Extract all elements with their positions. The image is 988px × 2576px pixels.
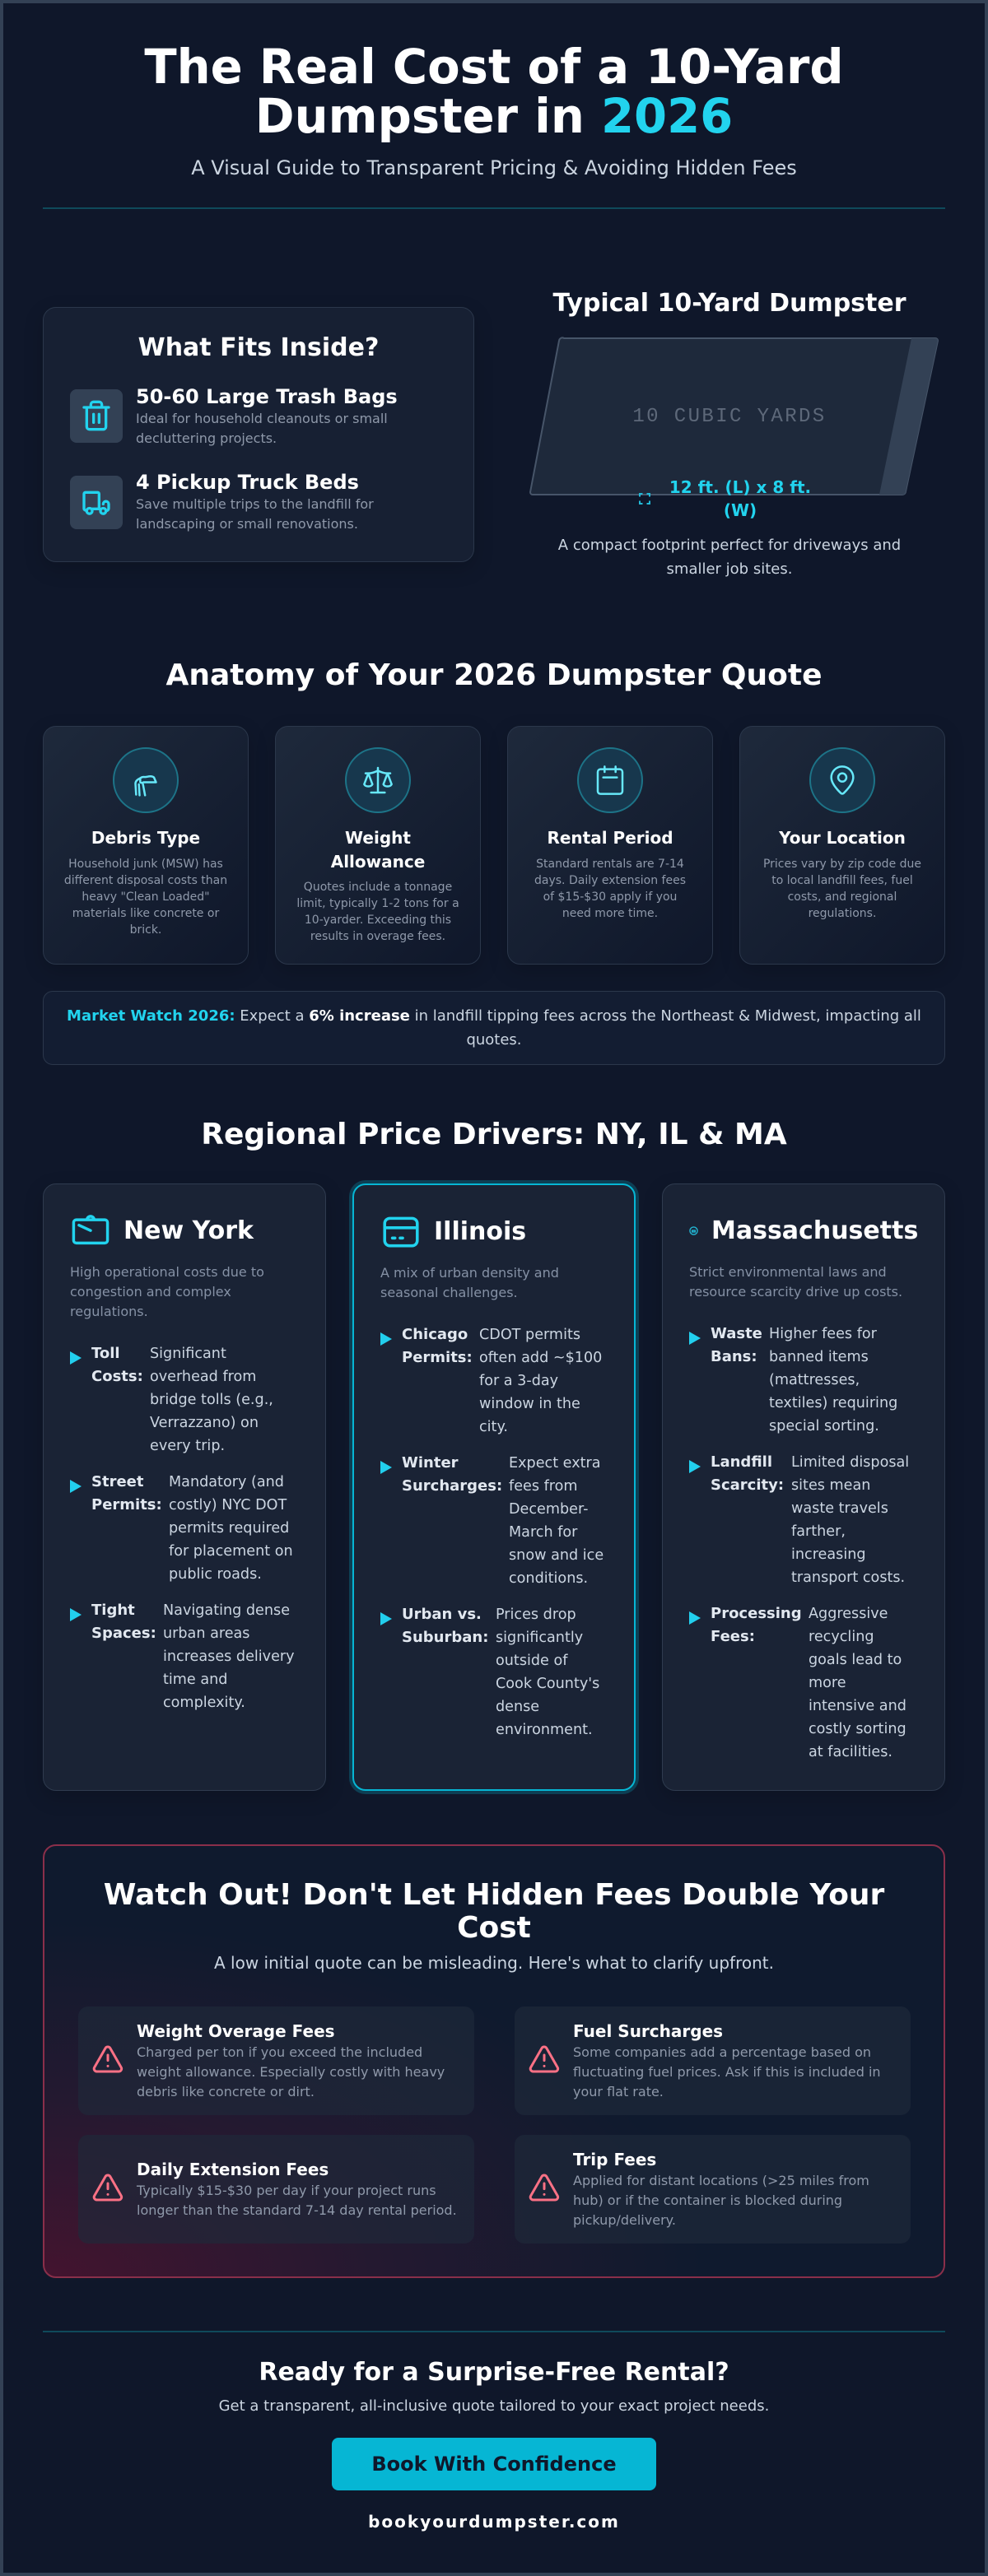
item description: truck beds: landscaping or small renovations.: [136, 516, 358, 532]
bullet: tight spaces: Spaces:: [91, 1625, 156, 1642]
state summary: new york: congestion and complex: [70, 1284, 231, 1300]
card: your location: [739, 726, 945, 965]
state summary: new york: [70, 1264, 264, 1319]
bullet: processing fees: goals lead to: [809, 1652, 902, 1668]
bullet: waste bans: (mattresses,: [769, 1372, 860, 1388]
text: debris type: heavy "Clean Loaded": [82, 890, 210, 904]
text: your location: Prices vary by zip code due: [763, 858, 921, 871]
state summary: illinois: A mix of urban density and: [380, 1265, 559, 1281]
website url: bookyourdumpster.com: [368, 2512, 620, 2532]
bullet: landfill scarcity: waste travels: [791, 1500, 888, 1517]
bullet: urban vs suburban: Prices drop: [496, 1607, 576, 1623]
bullet: street permits: Street: [91, 1473, 143, 1490]
bullet: street permits: for placement on: [169, 1543, 293, 1560]
bullet: tight spaces: time and: [163, 1672, 227, 1688]
icon: truck: [70, 476, 123, 529]
text: your location: costs, and regional: [788, 890, 897, 904]
bullet: waste bans: Bans:: [711, 1348, 757, 1365]
icon: calendar: [577, 747, 643, 813]
panel: massachusetts: [662, 1183, 945, 1791]
dimensions label: [669, 477, 811, 520]
bullet: processing fees: recycling: [809, 1629, 874, 1645]
bullet: chicago permits: Chicago: [402, 1326, 468, 1343]
fee text: fluctuating fuel prices. Ask if this is included in: [573, 2064, 881, 2080]
dimensions label: 12 ft. (L) x 8 ft.: [669, 477, 811, 497]
bullet: landfill scarcity: increasing: [791, 1546, 866, 1563]
heading: typical dumpster: Typical 10-Yard Dumpster: [552, 289, 906, 318]
bullet: winter surcharges: Surcharges:: [402, 1477, 502, 1495]
fee title: Daily Extension Fees: [137, 2160, 329, 2179]
bullet: landfill scarcity: Scarcity:: [711, 1476, 784, 1494]
state summary: illinois: [380, 1265, 559, 1300]
heading: regional: Regional Price Drivers: NY, IL & MA: [201, 1118, 787, 1151]
fee: trip fees: [515, 2135, 911, 2244]
bullet: urban vs suburban: [380, 1606, 599, 1738]
fee title: Trip Fees: [573, 2150, 656, 2169]
icon: debris: [113, 747, 179, 813]
heading: call to action: Ready for a Surprise-Free Rental?: [259, 2358, 729, 2387]
fee text: pickup/delivery.: [573, 2212, 676, 2228]
panel: illinois: [352, 1183, 636, 1791]
heading: watch out: Cost: [457, 1911, 531, 1945]
heading: watch out: Watch Out! Don't Let Hidden Fees Double Your: [104, 1878, 884, 1912]
card: debris type: [43, 726, 249, 965]
item description: trash bags: Ideal for household cleanouts or small: [136, 411, 388, 426]
button: book with confidence: Book With Confidence: [371, 2453, 617, 2476]
item description: trash bags: decluttering projects.: [136, 430, 277, 446]
bullet: toll costs: overhead from: [150, 1369, 256, 1385]
bullet: toll costs: Costs:: [91, 1368, 143, 1385]
bullet: chicago permits: often add ~$100: [479, 1350, 602, 1366]
bullet: toll costs: bridge tolls (e.g.,: [150, 1392, 273, 1408]
title: Dumpster in 2026: [255, 89, 733, 144]
title: weight allowance: Weight: [345, 828, 411, 848]
text: weight allowance: [296, 881, 459, 943]
callout text: Market Watch 2026: Expect a 6% increase in landfill tipping fees across the Northeast & Midwest, impacting all: [67, 1007, 921, 1025]
bullet: tight spaces: Navigating dense: [163, 1602, 290, 1619]
dimensions label: (W): [724, 500, 757, 520]
bullet: processing fees: at facilities.: [809, 1744, 892, 1760]
bullet: street permits: Permits:: [91, 1496, 162, 1514]
fee text: your flat rate.: [573, 2084, 664, 2099]
fee text: longer than the standard 7-14 day rental period.: [137, 2202, 457, 2218]
bullet: urban vs suburban: significantly: [496, 1630, 583, 1646]
bullet: tight spaces: complexity.: [163, 1695, 245, 1711]
bullet: chicago permits: window in the: [479, 1396, 580, 1412]
bullet: winter surcharges: Expect extra: [509, 1455, 601, 1472]
callout: market watch: [43, 991, 945, 1065]
bullet: toll costs: Toll: [91, 1345, 120, 1362]
button: book with confidence: [332, 2438, 656, 2490]
icon: scales: [345, 747, 411, 813]
bullet: waste bans: banned items: [769, 1349, 869, 1365]
bullet: landfill scarcity: Limited disposal: [791, 1454, 909, 1471]
icon: card: [383, 1216, 419, 1248]
text: rental period: Standard rentals are 7-14: [536, 858, 684, 871]
fee text: Applied for distant locations (>25 miles from: [573, 2173, 869, 2188]
state name: illinois: Illinois: [434, 1217, 526, 1246]
dumpster caption: [558, 537, 901, 578]
bullet: winter surcharges: conditions.: [509, 1570, 588, 1587]
fee text: debris like concrete or dirt.: [137, 2084, 315, 2099]
bullet: processing fees: intensive and: [809, 1698, 906, 1714]
text: weight allowance: 10-yarder. Exceeding this: [305, 914, 451, 927]
text: rental period: [534, 858, 686, 920]
bullet: urban vs suburban: Suburban:: [402, 1629, 488, 1646]
bullet: chicago permits: [380, 1326, 602, 1435]
fee text: Typically $15-$30 per day if your project runs: [137, 2183, 436, 2198]
bullet: toll costs: Significant: [150, 1346, 226, 1362]
title: rental period: Rental Period: [547, 828, 673, 848]
text: debris type: brick.: [130, 923, 161, 937]
bullet: toll costs: [70, 1345, 273, 1454]
bullet: tight spaces: urban areas: [163, 1625, 249, 1642]
dumpster caption: A compact footprint perfect for driveways and: [558, 537, 901, 554]
bullet: street permits: Mandatory (and: [169, 1474, 284, 1490]
text: your location: [763, 858, 921, 920]
title: debris type: Debris Type: [91, 828, 200, 848]
text: debris type: different disposal costs than: [64, 874, 227, 887]
text: debris type: Household junk (MSW) has: [68, 858, 223, 871]
panel: hidden fees: [43, 1844, 945, 2278]
bullet: landfill scarcity: sites mean: [791, 1477, 870, 1494]
bullet: chicago permits: for a 3-day: [479, 1373, 558, 1389]
bullet: toll costs: every trip.: [150, 1438, 225, 1454]
icon: briefcase: [72, 1215, 109, 1244]
title: [144, 40, 844, 144]
icon: dimensions: [639, 493, 650, 505]
text: your location: to local landfill fees, fuel: [771, 874, 913, 887]
icon: warning: [92, 2046, 124, 2072]
bullet: urban vs suburban: Urban vs.: [402, 1606, 482, 1623]
card: rental period: [507, 726, 713, 965]
bullet: urban vs suburban: dense: [496, 1699, 539, 1715]
fee text: weight allowance. Especially costly with heavy: [137, 2064, 445, 2080]
icon: trash can: [70, 389, 123, 443]
item description: trash bags: [136, 411, 388, 446]
bullet: chicago permits: CDOT permits: [479, 1327, 580, 1343]
bullet: processing fees: Aggressive: [809, 1606, 888, 1622]
heading: anatomy: Anatomy of Your 2026 Dumpster Quote: [165, 658, 823, 692]
title: weight allowance: [331, 828, 425, 872]
icon: warning: [92, 2174, 124, 2201]
text: your location: regulations.: [809, 907, 876, 920]
heading: what fits inside: What Fits Inside?: [138, 333, 379, 362]
bullet: winter surcharges: December-: [509, 1501, 588, 1518]
bullet: urban vs suburban: Cook County's: [496, 1676, 599, 1692]
title: your location: Your Location: [779, 828, 906, 848]
item description: truck beds: [136, 496, 374, 532]
bullet: waste bans: special sorting.: [769, 1418, 879, 1434]
icon: small badge: [689, 1226, 698, 1235]
bullet: winter surcharges: fees from: [509, 1478, 578, 1495]
fee text: Some companies add a percentage based on: [573, 2044, 871, 2060]
text: weight allowance: results in overage fees.: [310, 930, 445, 943]
text: debris type: materials like concrete or: [72, 907, 219, 920]
bullet: street permits: public roads.: [169, 1566, 262, 1583]
icon: warning: [529, 2046, 560, 2072]
bullet: tight spaces: [70, 1602, 295, 1711]
bullet: winter surcharges: [380, 1454, 604, 1587]
bullet: landfill scarcity: transport costs.: [791, 1569, 905, 1586]
state summary: new york: regulations.: [70, 1304, 148, 1319]
fee title: Fuel Surcharges: [573, 2021, 723, 2041]
illustration: dumpster: [529, 337, 939, 495]
dumpster caption: smaller job sites.: [667, 560, 792, 578]
fee: fuel surcharges: [515, 2006, 911, 2115]
title: The Real Cost of a 10-Yard: [144, 40, 844, 95]
bullet: landfill scarcity: [689, 1453, 909, 1586]
state summary: illinois: seasonal challenges.: [380, 1285, 518, 1300]
state summary: massachusetts: [689, 1264, 902, 1300]
bullet: waste bans: Higher fees for: [769, 1326, 877, 1342]
illustration: dumpster: 10 CUBIC YARDS: [632, 406, 827, 428]
bullet: processing fees: [689, 1605, 906, 1760]
bullet: processing fees: Processing: [711, 1605, 802, 1622]
fee text: [573, 2173, 869, 2228]
fee text: Charged per ton if you exceed the included: [137, 2044, 422, 2060]
bullet: landfill scarcity: farther,: [791, 1523, 846, 1540]
bullet: street permits: [70, 1473, 293, 1583]
state name: new york: New York: [124, 1216, 254, 1245]
panel: new york: [43, 1183, 326, 1791]
fee title: Weight Overage Fees: [137, 2021, 335, 2041]
state summary: new york: High operational costs due to: [70, 1264, 264, 1280]
bullet: toll costs: Verrazzano) on: [150, 1415, 259, 1431]
icon: location pin: [809, 747, 875, 813]
text: rental period: need more time.: [562, 907, 658, 920]
item description: truck beds: Save multiple trips to the landfill for: [136, 496, 374, 512]
callout text: [67, 1007, 921, 1049]
fee: weight overage: [78, 2006, 474, 2115]
bullet: landfill scarcity: Landfill: [711, 1453, 772, 1471]
bullet: street permits: costly) NYC DOT: [169, 1497, 287, 1514]
fee text: [573, 2044, 881, 2099]
icon: warning: [529, 2174, 560, 2201]
item title: truck beds: 4 Pickup Truck Beds: [136, 471, 359, 494]
item title: trash bags: 50-60 Large Trash Bags: [136, 385, 398, 408]
bullet: chicago permits: Permits:: [402, 1349, 473, 1366]
bullet: street permits: permits required: [169, 1520, 289, 1537]
fee text: hub) or if the container is blocked during: [573, 2192, 842, 2208]
text: rental period: of $15-$30 apply if you: [543, 890, 677, 904]
text: weight allowance: limit, typically 1-2 tons for a: [296, 897, 459, 910]
text: call to action: Get a transparent, all-inclusive quote tailored to your exact project needs.: [219, 2397, 769, 2415]
bullet: waste bans: [689, 1325, 897, 1434]
state summary: massachusetts: Strict environmental laws and: [689, 1264, 887, 1280]
callout text: quotes.: [466, 1030, 522, 1049]
fee text: [137, 2044, 445, 2099]
bullet: urban vs suburban: environment.: [496, 1722, 593, 1738]
bullet: winter surcharges: Winter: [402, 1454, 459, 1472]
bullet: processing fees: costly sorting: [809, 1721, 906, 1737]
bullet: tight spaces: Tight: [91, 1602, 135, 1619]
heading: watch out: [104, 1878, 884, 1945]
bullet: processing fees: more: [809, 1675, 846, 1691]
bullet: waste bans: Waste: [711, 1325, 762, 1342]
panel: what fits inside: [43, 307, 474, 562]
bullet: processing fees: Fees:: [711, 1628, 755, 1645]
bullet: tight spaces: increases delivery: [163, 1648, 295, 1665]
bullet: chicago permits: city.: [479, 1419, 508, 1435]
text: debris type: [64, 858, 227, 937]
card: weight allowance: [275, 726, 481, 965]
bullet: winter surcharges: March for: [509, 1524, 577, 1541]
subtitle: A Visual Guide to Transparent Pricing & Avoiding Hidden Fees: [191, 156, 797, 179]
fee: daily extension: [78, 2135, 474, 2244]
subheading: watch out: A low initial quote can be misleading. Here's what to clarify upfront.: [214, 1953, 774, 1973]
bullet: urban vs suburban: outside of: [496, 1653, 567, 1669]
bullet: winter surcharges: snow and ice: [509, 1547, 604, 1564]
text: rental period: days. Daily extension fees: [534, 874, 686, 887]
fee text: [137, 2183, 457, 2218]
bullet: waste bans: textiles) requiring: [769, 1395, 897, 1411]
state name: massachusetts: Massachusetts: [711, 1216, 918, 1245]
state summary: massachusetts: resource scarcity drive up costs.: [689, 1284, 902, 1300]
text: weight allowance: Quotes include a tonnage: [304, 881, 452, 894]
title: weight allowance: Allowance: [331, 852, 425, 872]
